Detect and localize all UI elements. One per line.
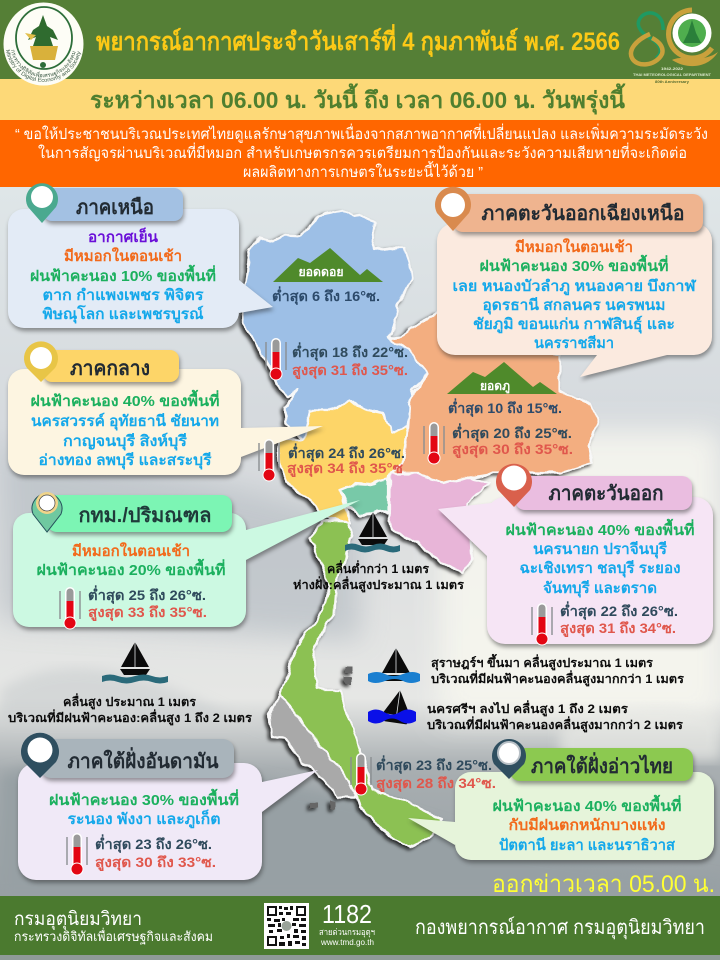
pin: east bbox=[496, 464, 532, 507]
temperatures: central bbox=[287, 443, 405, 477]
sea text: Nakhon Si Thammarat downward: นครศรีฯ ลงไป คลื่นสูง 1 ถึง 2 เมตร bbox=[427, 700, 629, 717]
department name: กรมอุตุนิยมวิทยา bbox=[14, 909, 142, 931]
temperatures: north: ต่ำสุด 18 ถึง 22°ซ. bbox=[292, 342, 408, 361]
background: misty mountains bbox=[0, 187, 720, 897]
east heading: ภาคตะวันออก bbox=[548, 483, 664, 505]
sea text: Surat Thani upward: บริเวณที่มีฝนฟ้าคะนองคลื่นสูงมากกว่า 1 เมตร bbox=[431, 670, 685, 687]
Andaman text bbox=[49, 788, 239, 829]
temperatures: east bbox=[560, 601, 678, 637]
temperatures: north: สูงสุด 31 ถึง 35°ซ. bbox=[292, 362, 408, 379]
issue time: ออกข่าวเวลา 05.00 น. bbox=[492, 871, 715, 898]
map of Thailand bbox=[243, 210, 597, 847]
Andaman text: ฝนฟ้าคะนอง 30% ของพื้นที่ bbox=[49, 788, 239, 809]
notice text: ผลผลิตทางการเกษตรในระยะนี้ไว้ด้วย ” bbox=[243, 161, 483, 181]
region: Bangkok and vicinity bbox=[340, 480, 388, 515]
east text: ฉะเชิงเทรา ชลบุรี ระยอง bbox=[520, 559, 680, 578]
Andaman text: ระนอง พังงา และภูเก็ต bbox=[68, 809, 220, 829]
pin: north bbox=[26, 183, 58, 223]
thermometer: Andaman bbox=[66, 833, 88, 876]
logo: ministry seal bbox=[4, 2, 84, 86]
callout: east bbox=[438, 464, 713, 646]
QR code bbox=[264, 903, 309, 949]
sea text: Andaman: คลื่นสูง ประมาณ 1 เมตร bbox=[63, 693, 197, 710]
Gulf text bbox=[492, 794, 682, 854]
temperatures: south: ต่ำสุด 23 ถึง 25°ซ. bbox=[376, 755, 492, 774]
region: northeast bbox=[388, 313, 597, 483]
thermometer: north bbox=[265, 338, 287, 380]
sea text: upper gulf: คลื่นต่ำกว่า 1 เมตร bbox=[327, 560, 430, 576]
notice band bbox=[0, 120, 720, 187]
mountain: phu peak: ยอดภู bbox=[480, 379, 510, 394]
sea text: Surat Thani upward bbox=[431, 653, 685, 687]
logo: 80th anniversary: 80th Anniversary bbox=[655, 79, 690, 84]
thermometer: central bbox=[258, 439, 280, 482]
central text: นครสวรรค์ อุทัยธานี ชัยนาท bbox=[31, 412, 219, 431]
east text: นครนายก ปราจีนบุรี bbox=[533, 541, 668, 559]
logo: 80th anniversary: 1942-2022 bbox=[661, 66, 684, 71]
north text: อากาศเย็น bbox=[88, 227, 159, 246]
logo: ministry seal: Ministry of Digital Economy and Society bbox=[6, 50, 82, 82]
Bangkok heading: กทม./ปริมณฑล bbox=[78, 505, 212, 527]
temperatures: northeast bbox=[452, 423, 573, 458]
time band bbox=[0, 79, 720, 120]
temperatures: northeast: สูงสุด 30 ถึง 35°ซ. bbox=[452, 441, 573, 458]
Andaman heading bbox=[40, 739, 234, 778]
northeast heading bbox=[453, 194, 703, 232]
temperatures: south bbox=[376, 755, 496, 792]
region: east bbox=[390, 473, 490, 572]
boat: upper south gulf bbox=[368, 648, 420, 683]
sea text: Andaman: บริเวณที่มีฝนฟ้าคะนอง:คลื่นสูง 1 ถึง 2 เมตร bbox=[8, 709, 253, 726]
mountain: phu peak bbox=[447, 362, 557, 394]
temperatures: Bangkok: ต่ำสุด 25 ถึง 26°ซ. bbox=[88, 585, 206, 604]
callout: Gulf coast bbox=[408, 739, 714, 860]
northeast text: ฝนฟ้าคะนอง 30% ของพื้นที่ bbox=[480, 254, 669, 275]
ministry name: กระทรวงดิจิทัลเพื่อเศรษฐกิจและสังคม bbox=[14, 928, 213, 945]
region: Gulf coast bbox=[280, 522, 442, 847]
Gulf text: ฝนฟ้าคะนอง 40% ของพื้นที่ bbox=[492, 794, 682, 815]
north text: มีหมอกในตอนเช้า bbox=[64, 247, 182, 265]
Andaman heading: ภาคใต้ฝั่งอันดามัน bbox=[68, 746, 219, 773]
region: Andaman coast bbox=[270, 693, 357, 797]
region: central bbox=[278, 400, 408, 523]
north text: พิษณุโลก และเพชรบูรณ์ bbox=[42, 304, 204, 324]
callout: north bbox=[8, 183, 273, 328]
boat: central gulf bbox=[345, 512, 400, 552]
pin: northeast bbox=[435, 187, 471, 231]
temperatures: east: สูงสุด 31 ถึง 34°ซ. bbox=[560, 620, 676, 637]
logo: ministry seal: กระทรวงดิจิทัลเพื่อเศรษฐกิจและสังคม bbox=[11, 50, 76, 78]
temperatures: central: ต่ำสุด 24 ถึง 26°ซ. bbox=[288, 443, 405, 462]
pin: central bbox=[24, 341, 58, 382]
Bangkok text bbox=[36, 542, 226, 579]
pin: Bangkok bbox=[32, 492, 62, 532]
thermometer: east bbox=[531, 603, 553, 646]
northeast text bbox=[452, 238, 696, 352]
northeast heading: ภาคตะวันออกเฉียงเหนือ bbox=[482, 202, 684, 225]
temperatures: north bbox=[292, 342, 408, 379]
temperatures: south: สูงสุด 28 ถึง 34°ซ. bbox=[376, 775, 496, 792]
north text: ตาก กำแพงเพชร พิจิตร bbox=[42, 286, 205, 304]
website: www.tmd.go.th bbox=[320, 938, 374, 947]
Bangkok heading bbox=[47, 495, 232, 532]
temperatures: Andaman bbox=[95, 834, 216, 871]
peak temperature: north: ต่ำสุด 6 ถึง 16°ซ. bbox=[272, 286, 380, 305]
central heading bbox=[43, 350, 179, 382]
thermometer: Bangkok bbox=[59, 587, 81, 630]
sea text: upper gulf bbox=[293, 560, 465, 593]
callout: central bbox=[8, 341, 323, 475]
callout: Andaman coast bbox=[18, 733, 318, 880]
north text bbox=[30, 227, 216, 324]
notice text: ในการสัญจรผ่านบริเวณที่มีหมอก สำหรับเกษตรกรควรเตรียมการป้องกันและระวังความเสียหายที่จะเกิดต่อ bbox=[38, 142, 687, 162]
north text: ฝนฟ้าคะนอง 10% ของพื้นที่ bbox=[30, 264, 216, 285]
central text: ฝนฟ้าคะนอง 40% ของพื้นที่ bbox=[30, 389, 220, 410]
callout: northeast bbox=[435, 187, 712, 377]
temperatures: northeast: ต่ำสุด 20 ถึง 25°ซ. bbox=[452, 423, 572, 442]
temperatures: Andaman: ต่ำสุด 23 ถึง 26°ซ. bbox=[95, 834, 212, 853]
pin: Gulf bbox=[492, 739, 526, 779]
pin: Andaman bbox=[21, 733, 59, 778]
peak temperature: northeast: ต่ำสุด 10 ถึง 15°ซ. bbox=[448, 398, 562, 417]
header band bbox=[0, 0, 720, 79]
temperatures: east: ต่ำสุด 22 ถึง 26°ซ. bbox=[560, 601, 678, 620]
central text bbox=[30, 389, 220, 470]
footer band bbox=[0, 896, 720, 960]
central text: กาญจนบุรี สิงห์บุรี bbox=[63, 432, 188, 451]
mountain: doi peak: ยอดดอย bbox=[298, 265, 344, 279]
logo: 80th anniversary: THAI METEOROLOGICAL DEPARTMENT bbox=[633, 72, 712, 77]
boat: lower south gulf bbox=[368, 688, 416, 725]
Bangkok text: มีหมอกในตอนเช้า bbox=[72, 542, 190, 560]
east text: ฝนฟ้าคะนอง 40% ของพื้นที่ bbox=[506, 518, 695, 539]
temperatures: central: สูงสุด 34 ถึง 35°ซ bbox=[287, 460, 404, 477]
Gulf heading: ภาคใต้ฝั่งอ่าวไทย bbox=[531, 751, 673, 778]
hotline caption: สายด่วนกรมอุตุฯ bbox=[319, 927, 375, 938]
Bangkok text: ฝนฟ้าคะนอง 20% ของพื้นที่ bbox=[36, 558, 226, 579]
islands bbox=[310, 668, 352, 809]
mountain: doi peak bbox=[273, 248, 383, 282]
thermometer: northeast bbox=[423, 422, 445, 464]
Gulf text: กับมีฝนตกหนักบางแห่ง bbox=[508, 817, 666, 834]
sea text: Nakhon Si Thammarat downward bbox=[427, 700, 684, 733]
east text: จันทบุรี และตราด bbox=[543, 580, 657, 598]
temperatures: Andaman: สูงสุด 30 ถึง 33°ซ. bbox=[95, 854, 216, 871]
temperatures: Bangkok: สูงสุด 33 ถึง 35°ซ. bbox=[88, 604, 207, 621]
central text: อ่างทอง ลพบุรี และสระบุรี bbox=[38, 452, 212, 470]
sea text: upper gulf: ห่างฝั่ง:คลื่นสูงประมาณ 1 เมตร bbox=[293, 576, 465, 593]
Gulf heading bbox=[510, 748, 693, 781]
boat: Andaman sea bbox=[102, 642, 168, 684]
northeast text: ชัยภูมิ ขอนแก่น กาฬสินธุ์ และ bbox=[473, 315, 675, 334]
hotline: 1182 bbox=[322, 899, 372, 929]
east heading bbox=[515, 476, 692, 510]
northeast text: เลย หนองบัวลำภู หนองคาย บึงกาฬ bbox=[452, 277, 696, 296]
sea text: Surat Thani upward: สุราษฎร์ฯ ขึ้นมา คลื่นสูงประมาณ 1 เมตร bbox=[431, 653, 654, 671]
northeast text: อุดรธานี สกลนคร นครพนม bbox=[482, 297, 666, 315]
north heading bbox=[43, 188, 183, 221]
north heading: ภาคเหนือ bbox=[76, 196, 154, 219]
notice text bbox=[15, 123, 708, 181]
temperatures: Bangkok bbox=[88, 585, 207, 621]
Gulf text: ปัตตานี ยะลา และนราธิวาส bbox=[499, 836, 676, 854]
central heading: ภาคกลาง bbox=[70, 358, 150, 380]
logo: 80th anniversary bbox=[631, 10, 718, 84]
title: พยากรณ์อากาศประจำวันเสาร์ที่ 4 กุมภาพันธ์ พ.ศ. 2566 bbox=[96, 24, 620, 58]
northeast text: นครราชสีมา bbox=[534, 335, 614, 352]
northeast text: มีหมอกในตอนเช้า bbox=[515, 238, 633, 256]
sea text: Andaman bbox=[8, 693, 253, 726]
subtitle: forecast period: ระหว่างเวลา 06.00 น. วันนี้ ถึง เวลา 06.00 น. วันพรุ่งนี้ bbox=[90, 83, 626, 115]
region: north bbox=[243, 210, 427, 440]
east text bbox=[506, 518, 695, 598]
thermometer: south bbox=[350, 753, 372, 796]
sea text: Nakhon Si Thammarat downward: บริเวณที่มีฝนฟ้าคะนองคลื่นสูงมากกว่า 2 เมตร bbox=[427, 716, 684, 733]
callout: Bangkok and vicinity bbox=[13, 492, 360, 630]
